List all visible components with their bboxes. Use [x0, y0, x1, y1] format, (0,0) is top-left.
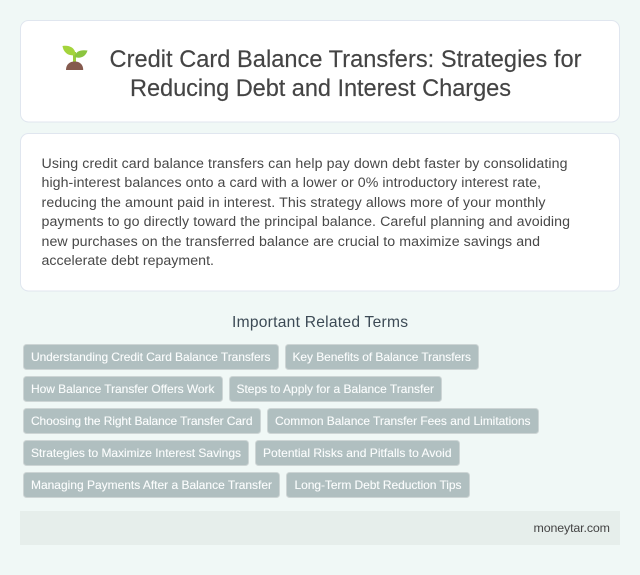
text block: description: accelerate debt repayment. — [42, 253, 214, 269]
panel: title card — [20, 20, 620, 122]
chip — [24, 472, 280, 498]
panel: description — [20, 134, 620, 291]
heading: related terms: Important Related Terms — [232, 314, 408, 331]
chip: Choosing the Right Balance Transfer Card — [31, 414, 252, 428]
chip: Steps to Apply for a Balance Transfer — [236, 382, 434, 396]
footer: moneytar.com — [534, 521, 610, 535]
chip: Common Balance Transfer Fees and Limitations — [275, 414, 530, 428]
chip — [24, 376, 222, 402]
chip — [230, 376, 442, 402]
related term chips — [24, 344, 538, 498]
chip — [268, 408, 538, 434]
chip: Long-Term Debt Reduction Tips — [294, 478, 462, 492]
chip: Key Benefits of Balance Transfers — [292, 350, 471, 364]
title — [110, 47, 582, 102]
chip — [24, 440, 248, 466]
chip: How Balance Transfer Offers Work — [31, 382, 216, 396]
title: Credit Card Balance Transfers: Strategies for — [110, 47, 582, 73]
chip: Potential Risks and Pitfalls to Avoid — [263, 446, 452, 460]
text block: description: new purchases on the transferred balance are crucial to maximize savings and — [42, 234, 540, 250]
text block: description: reducing the amount paid in interest. This strategy allows more of your monthly — [42, 195, 546, 211]
text block: description — [42, 156, 570, 269]
text block: description: high-interest balances onto a card with a lower or 0% introductory interest rate, — [42, 175, 541, 191]
chip: Understanding Credit Card Balance Transfers — [31, 350, 270, 364]
chip — [24, 344, 278, 370]
chip: Strategies to Maximize Interest Savings — [31, 446, 241, 460]
chip — [256, 440, 460, 466]
chip — [286, 344, 478, 370]
icon: sprout — [62, 46, 88, 70]
text block: description: payments to go directly toward the principal balance. Careful planning and avoiding — [42, 214, 570, 230]
chip — [286, 472, 470, 498]
chip — [24, 408, 260, 434]
chip: Managing Payments After a Balance Transfer — [31, 478, 272, 492]
title: Reducing Debt and Interest Charges — [130, 76, 511, 102]
footer — [20, 511, 620, 545]
text block: description: Using credit card balance transfers can help pay down debt faster by consolidating — [42, 156, 568, 172]
